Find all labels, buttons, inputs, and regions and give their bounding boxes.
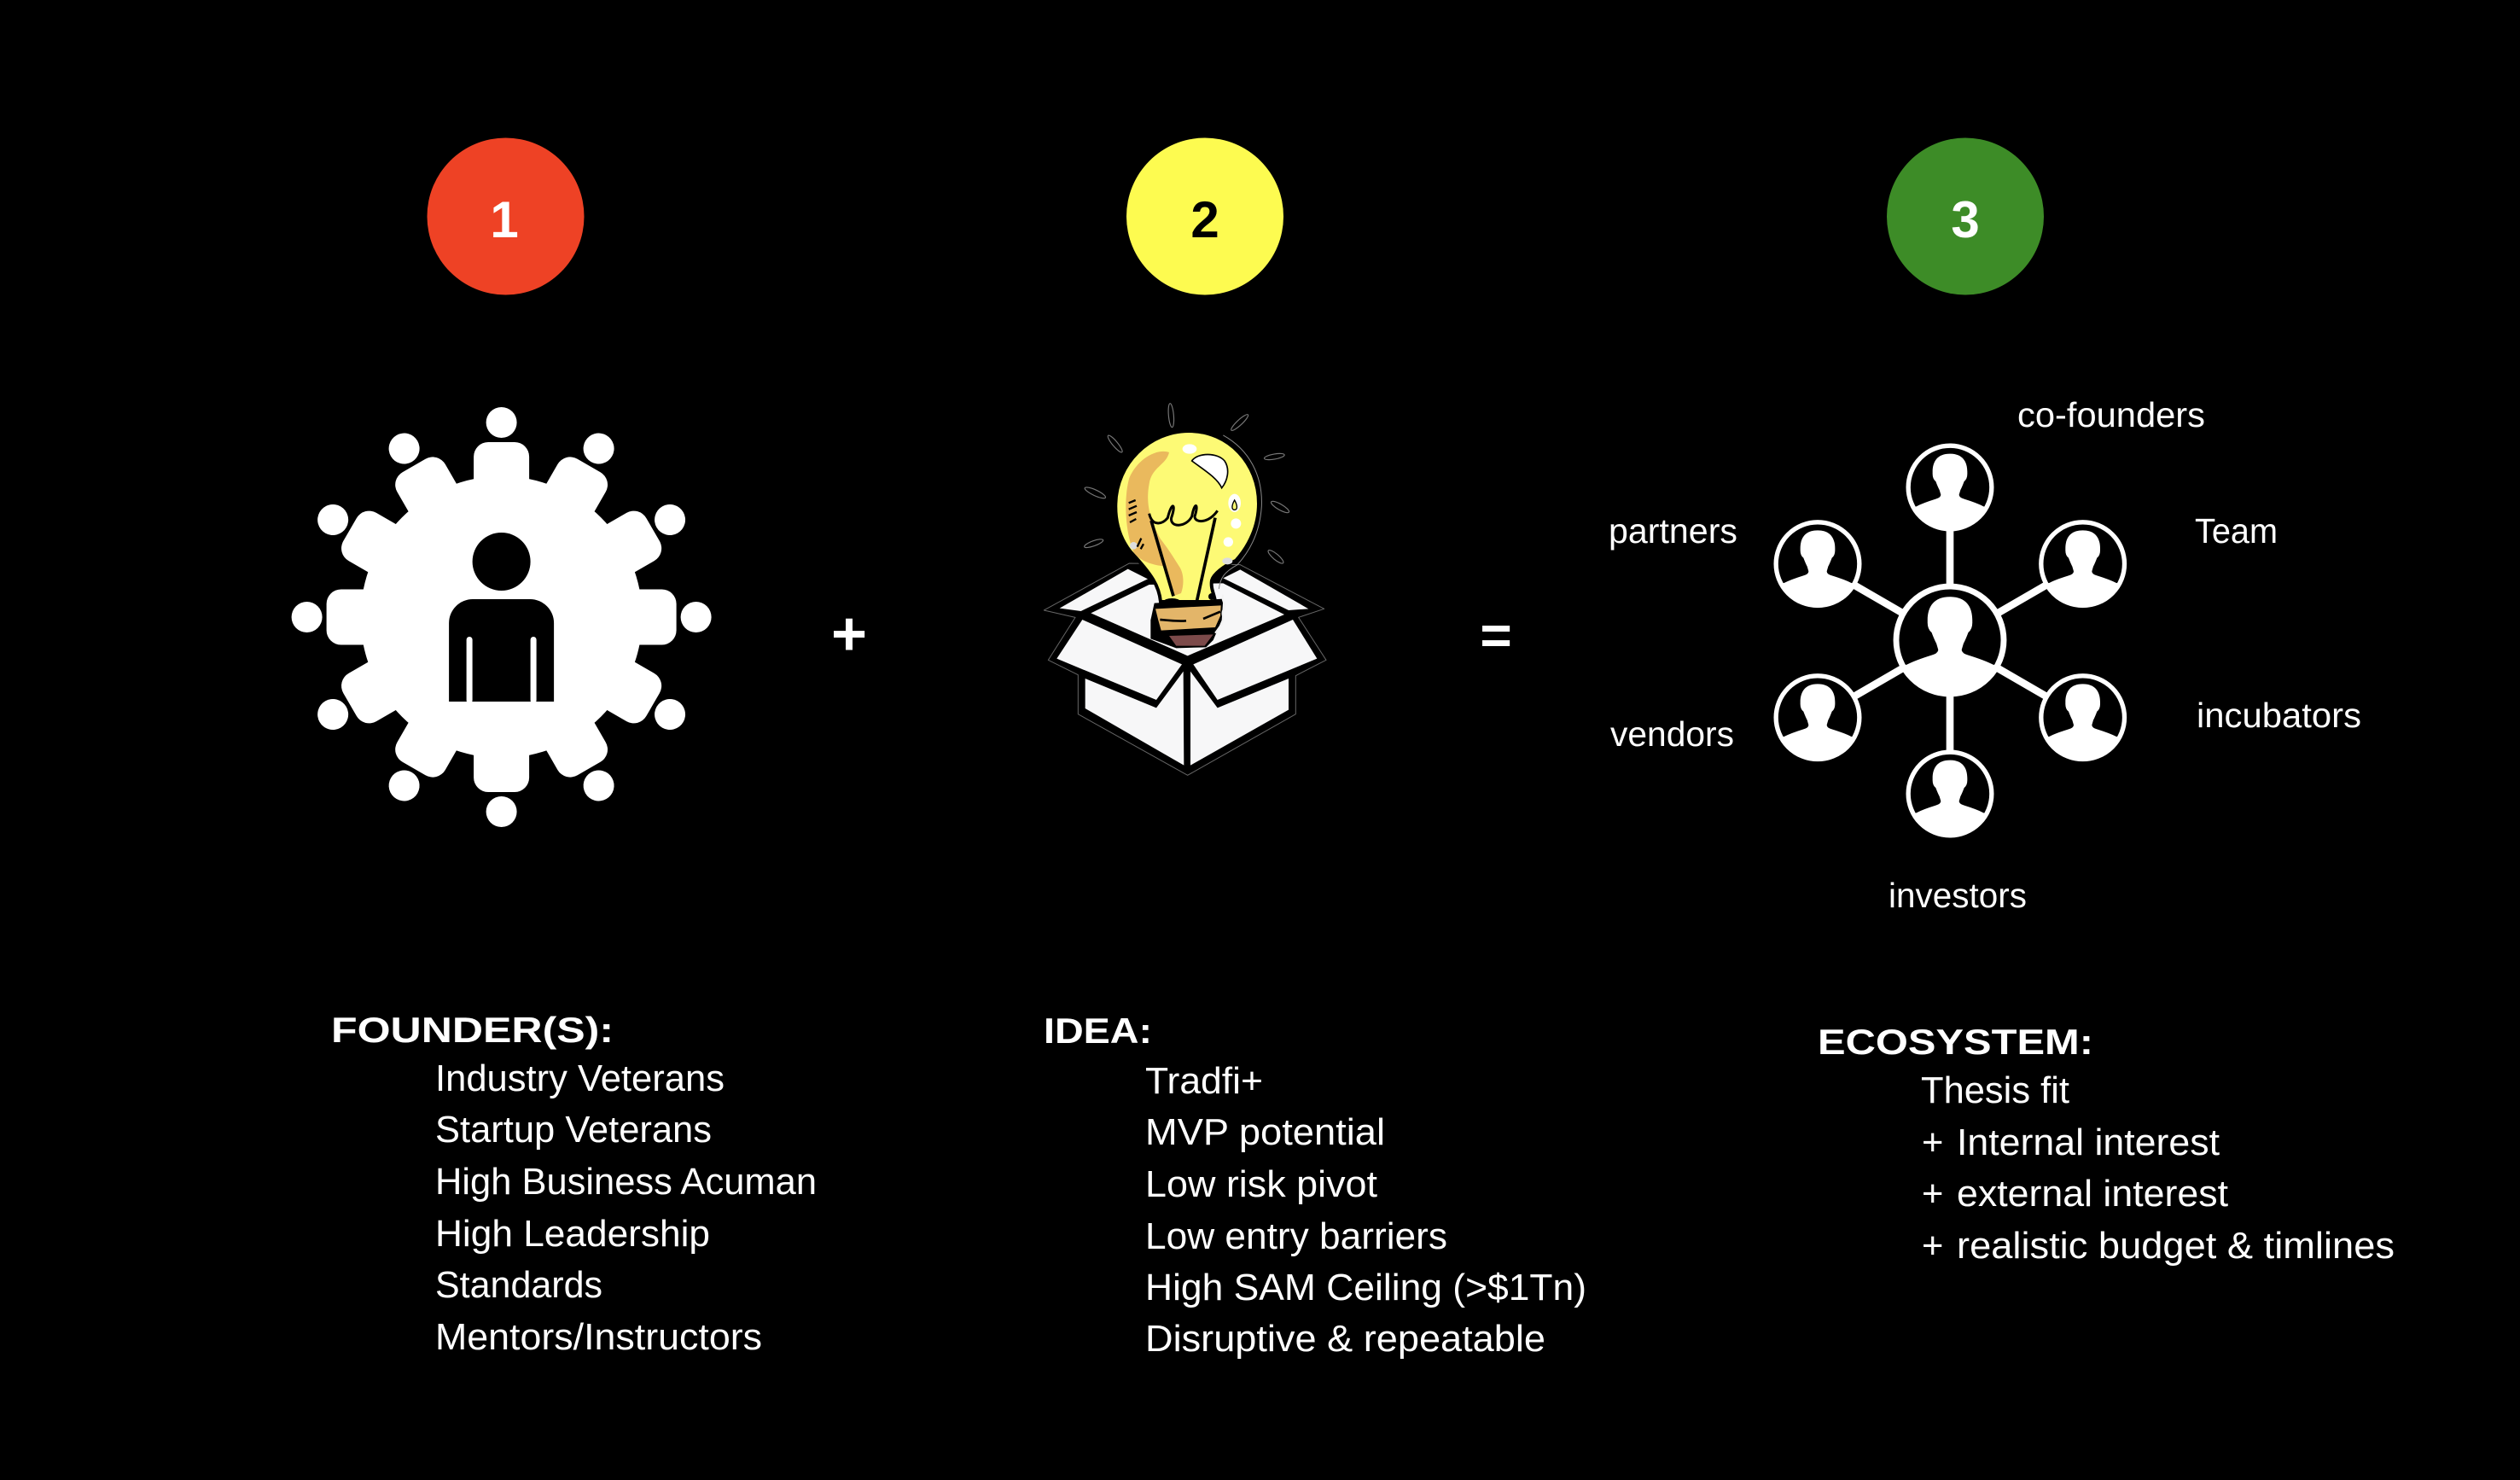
criteria list: + [1922, 1226, 1943, 1267]
number badge 3: 3 [1951, 191, 1980, 248]
criteria list: High SAM Ceiling (>$1Tn) [1145, 1267, 1586, 1308]
panel: idea column [1044, 138, 1586, 1360]
box [1044, 563, 1326, 775]
criteria list [1921, 1070, 2395, 1267]
criteria list: High Business Acuman [435, 1162, 817, 1203]
criteria list: Tradfi+ [1145, 1061, 1263, 1102]
criteria list: realistic budget & timlines [1957, 1226, 2395, 1267]
icon: people network [1776, 446, 2124, 836]
criteria list: + [1922, 1122, 1943, 1163]
number badge 1: 1 [490, 191, 519, 248]
criteria list: Industry Veterans [435, 1058, 725, 1099]
plus operator: + [831, 600, 867, 668]
criteria list: Startup Veterans [435, 1110, 712, 1151]
heading: idea: IDEA: [1044, 1011, 1152, 1051]
criteria list: MVP potential [1145, 1112, 1385, 1153]
criteria list: Low entry barriers [1145, 1216, 1447, 1257]
criteria list [435, 1058, 817, 1358]
number badge 1 [427, 138, 584, 295]
criteria list: external interest [1957, 1174, 2228, 1215]
icon: founder gear with person [292, 407, 712, 827]
network labels: co-founders [2017, 395, 2205, 434]
number badge 3 [1887, 138, 2044, 295]
criteria list: Low risk pivot [1145, 1164, 1377, 1205]
criteria list [1145, 1061, 1586, 1360]
number badge 2 [1126, 138, 1283, 295]
criteria list: Standards [435, 1265, 602, 1306]
panel: founder column [292, 138, 817, 1358]
network labels: Team [2195, 511, 2278, 551]
network labels: incubators [2197, 696, 2361, 735]
number badge 2: 2 [1190, 191, 1219, 248]
text block: founder criteria [331, 1010, 817, 1358]
icon: light bulb in open box [1044, 403, 1326, 775]
network labels [1609, 395, 2361, 915]
network labels: vendors [1610, 714, 1734, 754]
criteria list: + [1922, 1174, 1943, 1215]
criteria list: Thesis fit [1921, 1070, 2069, 1111]
criteria list: Mentors/Instructors [435, 1317, 762, 1358]
heading: founders: FOUNDER(S): [331, 1010, 614, 1050]
light rays [1084, 403, 1290, 565]
heading: ecosystem: ECOSYSTEM: [1818, 1022, 2093, 1062]
network labels: investors [1889, 876, 2027, 915]
equals operator: = [1480, 604, 1512, 666]
bulb [1115, 431, 1261, 648]
text block: ecosystem criteria [1818, 1022, 2395, 1267]
criteria list: High Leadership [435, 1214, 710, 1255]
panel: ecosystem column [1609, 138, 2395, 1267]
criteria list: Internal interest [1957, 1122, 2220, 1163]
network labels: partners [1609, 511, 1737, 551]
text block: idea criteria [1044, 1011, 1586, 1360]
criteria list: Disruptive & repeatable [1145, 1319, 1545, 1360]
